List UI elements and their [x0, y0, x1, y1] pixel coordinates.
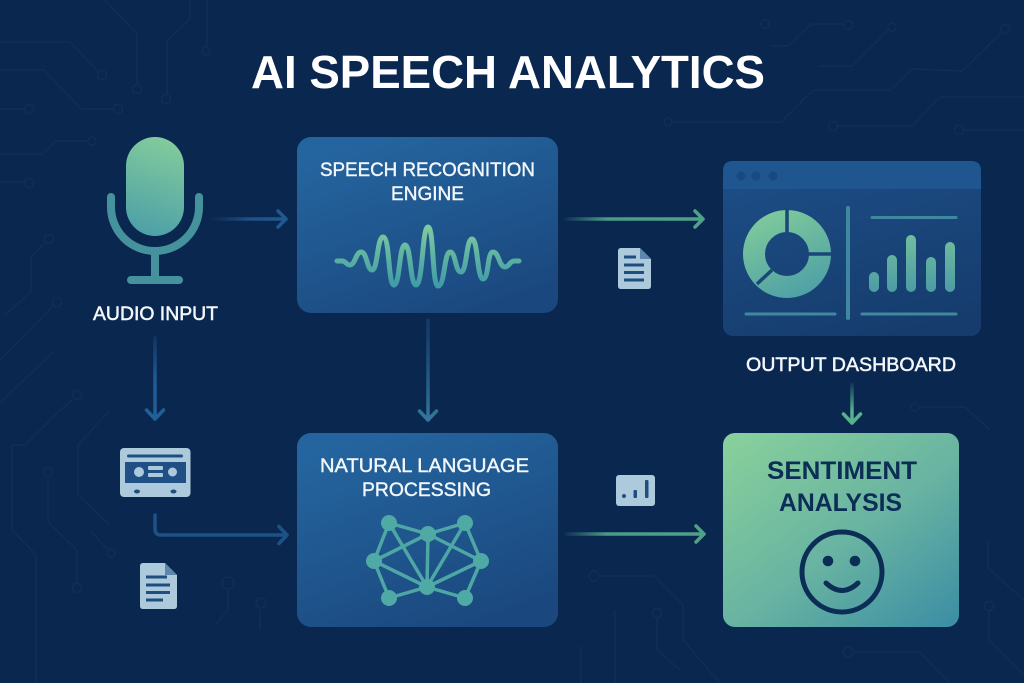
label: audio input: AUDIO INPUT	[93, 303, 218, 325]
divider	[846, 206, 850, 320]
panel: sentiment analysis	[723, 433, 959, 627]
arrow: dashboard to sentiment	[844, 384, 860, 423]
heading: natural language processing: PROCESSING	[362, 479, 491, 501]
arrow: speech recognition to dashboard	[566, 211, 703, 227]
donut chart	[754, 208, 833, 287]
heading: sentiment analysis	[767, 457, 917, 517]
audio input: microphone and label	[93, 137, 218, 325]
heading: natural language processing	[320, 455, 529, 501]
arrow: speech recognition down to nlp	[420, 320, 436, 420]
heading: sentiment analysis: ANALYSIS	[779, 489, 902, 517]
arrow: cassette to nlp	[155, 515, 287, 544]
icon: small bar chart card	[616, 475, 655, 506]
arrow: audio input down to cassette	[146, 338, 164, 419]
arrow: nlp to sentiment	[566, 526, 704, 542]
title: AI SPEECH ANALYTICS	[251, 46, 765, 98]
panel: natural language processing	[297, 433, 558, 627]
icon: document top	[618, 248, 651, 289]
caption lines	[746, 218, 956, 314]
icon: microphone	[111, 137, 199, 280]
heading: speech recognition engine	[320, 160, 535, 205]
bar chart	[869, 235, 955, 292]
icon: cassette	[120, 448, 190, 497]
icon: waveform	[337, 227, 519, 286]
icon: smiley face	[802, 532, 882, 612]
window title bar	[723, 161, 981, 189]
heading: speech recognition engine: SPEECH RECOGNITION	[320, 160, 535, 181]
arrow: audio input to speech recognition	[214, 211, 286, 227]
icon: document bottom	[140, 563, 177, 609]
panel: speech recognition engine	[297, 137, 558, 313]
heading: speech recognition engine: ENGINE	[391, 184, 464, 205]
label: output dashboard: OUTPUT DASHBOARD	[746, 354, 956, 376]
icon: neural network	[366, 515, 489, 606]
panel: output dashboard window	[723, 161, 981, 336]
heading: natural language processing: NATURAL LANGUAGE	[320, 455, 529, 477]
window dots	[736, 172, 778, 180]
heading: sentiment analysis: SENTIMENT	[767, 457, 917, 485]
